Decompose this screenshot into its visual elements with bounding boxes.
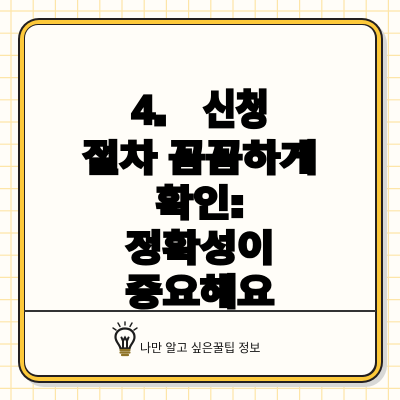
- title: 4.: [132, 87, 166, 133]
- title: [82, 87, 317, 312]
- title: 정확성이: [125, 227, 275, 268]
- title: 확인:: [156, 183, 244, 223]
- title: 중요해요: [125, 272, 275, 312]
- title: 신청: [203, 87, 269, 133]
- icon: light bulb: [112, 321, 138, 356]
- title: 절차 꼼꼼하게: [83, 138, 317, 178]
- footer text: 나만 알고 싶은꿀팁 정보: [140, 341, 260, 355]
